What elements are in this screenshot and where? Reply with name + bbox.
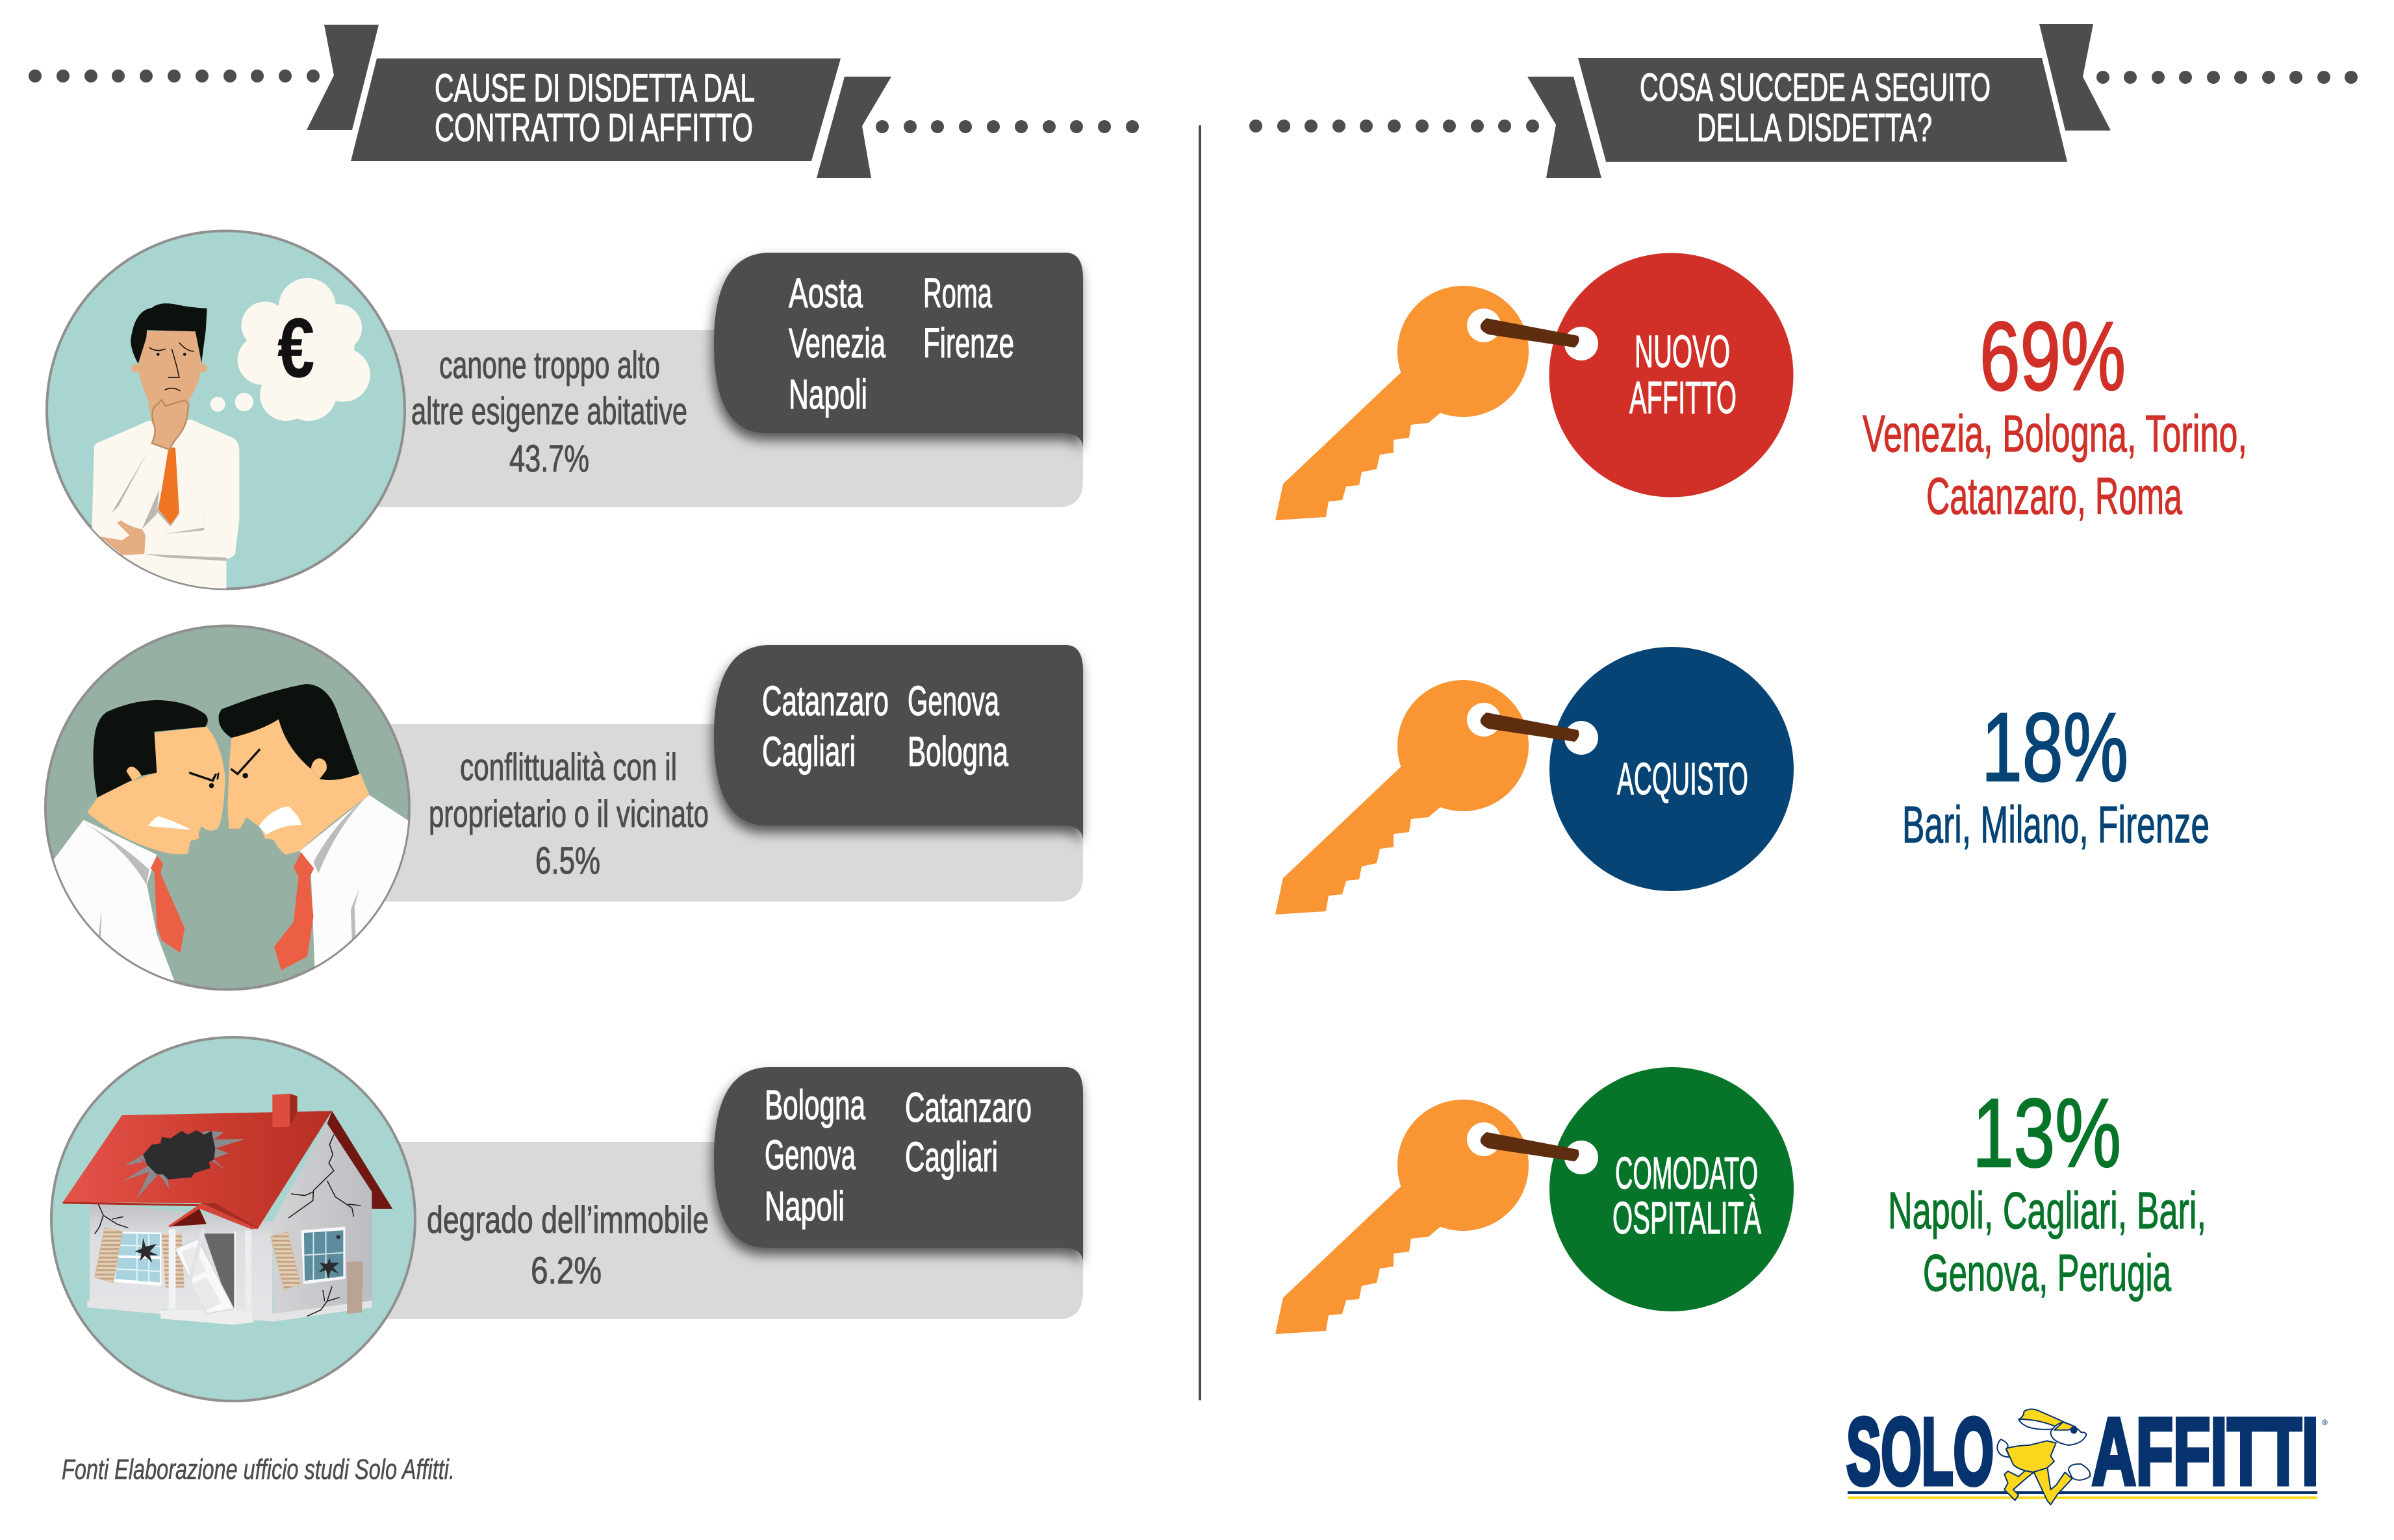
icon: key 2 — [1275, 680, 1529, 915]
stat: 18%: Bari, Milano, Firenze — [1902, 796, 2209, 853]
source note: Fonti Elaborazione ufficio studi Solo Affitti. — [62, 1454, 455, 1485]
banner: cause di disdetta — [29, 25, 1139, 178]
stat: 13%: 13% — [1972, 1078, 2121, 1187]
cities 3: Genova — [765, 1131, 856, 1178]
panel: degrado — [51, 1037, 1083, 1401]
cities 3: Napoli — [765, 1183, 845, 1230]
cities 1: Firenze — [923, 320, 1014, 366]
banner: cosa succede: DELLA DISDETTA? — [1697, 106, 1932, 149]
panel: conflittualità — [42, 626, 1083, 990]
logo wordmark: SOLO — [1846, 1398, 1994, 1504]
banner: cause di disdetta: CONTRATTO DI AFFITTO — [435, 106, 753, 149]
grey bar 2 — [260, 724, 1083, 902]
cities 3 — [765, 1081, 1032, 1230]
tag text 2: ACQUISTO — [1617, 753, 1748, 804]
logo: solo affitti: ® — [2322, 1418, 2328, 1427]
icon: key 1 — [1275, 286, 1529, 520]
key tag: nuovo affitto — [1275, 253, 1793, 520]
label 1: 43.7% — [509, 438, 589, 480]
stat: 69%: Catanzaro, Roma — [1926, 467, 2182, 525]
icon: key 3 — [1275, 1100, 1529, 1334]
banner: cosa succede — [1249, 24, 2358, 178]
key tag: acquisto — [1275, 647, 1794, 915]
key tag: comodato ospitalità — [1275, 1067, 1794, 1334]
cities 3: Cagliari — [905, 1133, 998, 1180]
cities 1: Roma — [923, 270, 992, 316]
label 2: proprietario o il vicinato — [429, 793, 709, 835]
label 2 — [429, 746, 709, 882]
label 1 — [411, 344, 687, 480]
vertical divider — [1199, 125, 1201, 1400]
label 2: conflittualità con il — [460, 746, 677, 789]
stat: 18% — [1902, 692, 2209, 853]
dark city box 3 — [714, 1067, 1083, 1261]
label 3: degrado dell’immobile — [427, 1199, 709, 1241]
stat: 69% — [1863, 301, 2247, 525]
green tag — [1549, 1067, 1794, 1311]
cities 1 — [789, 270, 1014, 418]
cities 1: Venezia — [789, 320, 885, 366]
circle illustration: damaged house — [51, 1037, 415, 1401]
circle illustration: arguing men — [42, 626, 413, 990]
logo wordmark — [1846, 1398, 2319, 1504]
stat: 13%: Genova, Perugia — [1923, 1244, 2171, 1302]
label 3 — [427, 1199, 709, 1292]
cities 2: Cagliari — [762, 728, 856, 775]
grey bar 1 — [260, 330, 1083, 507]
stat: 13%: Napoli, Cagliari, Bari, — [1888, 1181, 2206, 1239]
stat: 18%: 18% — [1981, 692, 2128, 802]
red tag — [1549, 253, 1793, 498]
blue tag — [1549, 647, 1794, 891]
cities 3: Bologna — [765, 1081, 865, 1128]
tag text 3 — [1612, 1148, 1761, 1243]
icon: rabbit mascot — [1997, 1409, 2090, 1505]
stat: 13% — [1888, 1078, 2206, 1302]
label 2: 6.5% — [535, 840, 600, 882]
label 1: canone troppo alto — [439, 344, 660, 386]
panel: canone troppo alto — [47, 231, 1083, 588]
banner: cosa succede: COSA SUCCEDE A SEGUITO — [1640, 66, 1991, 109]
grey bar 3 — [260, 1142, 1083, 1319]
tag text 1: NUOVO — [1635, 326, 1730, 377]
dark city box 1 — [714, 253, 1083, 447]
tag text 3: OSPITALITÀ — [1612, 1193, 1761, 1243]
cities 2 — [762, 677, 1008, 775]
logo: solo affitti — [1846, 1398, 2328, 1505]
label 3: 6.2% — [531, 1250, 602, 1292]
cities 2: Bologna — [908, 728, 1008, 775]
tag text 3: COMODATO — [1615, 1148, 1758, 1198]
banner: cause di disdetta: CAUSE DI DISDETTA DAL — [435, 66, 755, 110]
cities 2: Genova — [908, 677, 999, 724]
circle illustration: thinking man — [47, 231, 405, 588]
stat: 69%: 69% — [1980, 301, 2126, 410]
tag text 1: AFFITTO — [1629, 372, 1737, 423]
cities 1: Napoli — [789, 371, 867, 418]
dark city box 2 — [714, 645, 1083, 839]
circle illustration: thinking man: € — [277, 300, 314, 395]
label 1: altre esigenze abitative — [411, 390, 687, 433]
cities 1: Aosta — [789, 270, 863, 316]
cities 2: Catanzaro — [762, 677, 889, 724]
cities 3: Catanzaro — [905, 1084, 1032, 1131]
tag text 1 — [1629, 326, 1737, 423]
